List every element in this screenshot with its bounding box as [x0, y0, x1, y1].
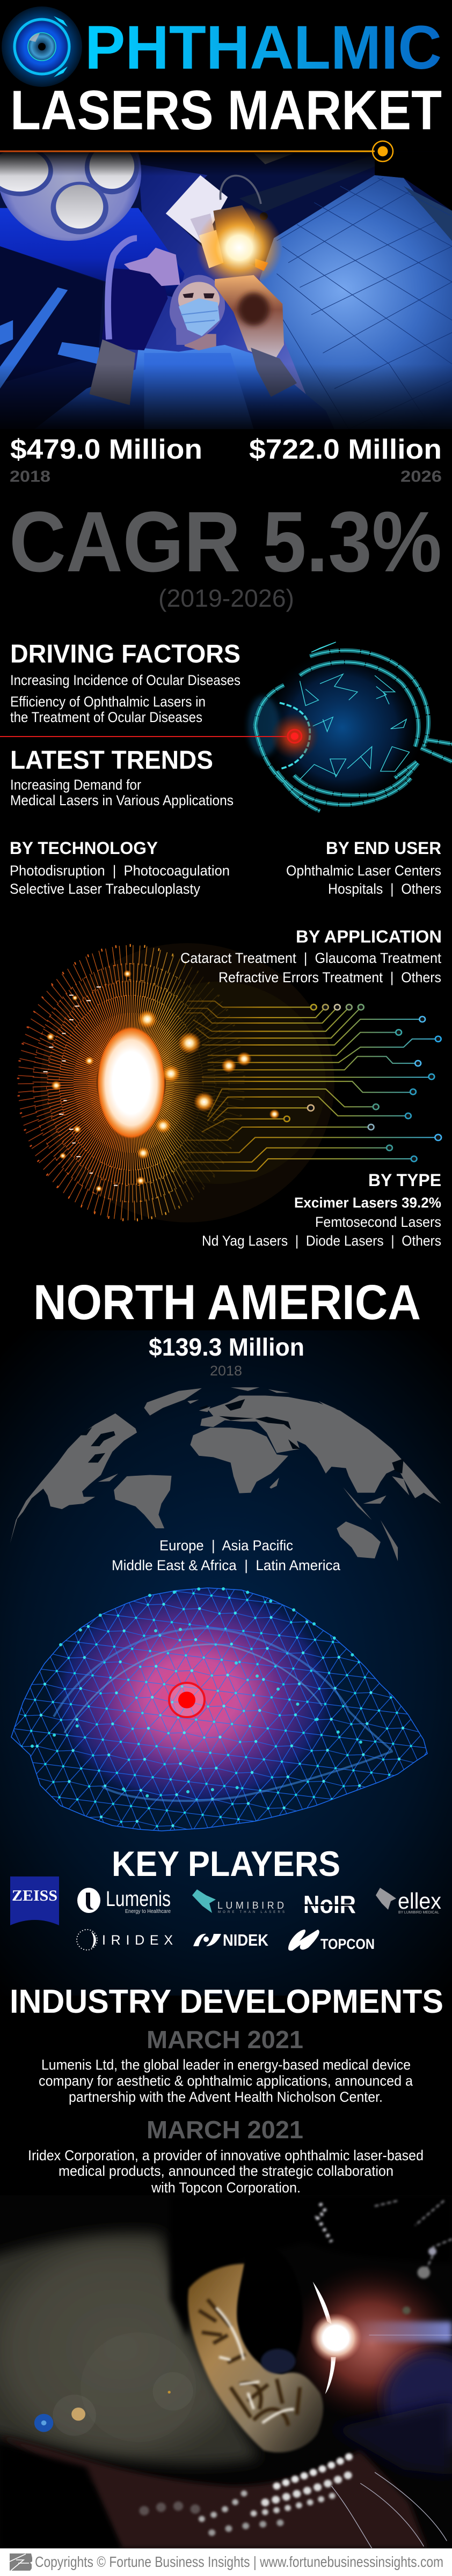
hero photo: surgeon with ophthalmic laser — [0, 151, 452, 429]
factor two: Efficiency of Ophthalmic Lasers in — [10, 694, 206, 710]
lens flare dots — [53, 2395, 96, 2436]
iridex development text — [28, 2147, 424, 2196]
other regions list: Europe | Asia Pacific — [159, 1537, 293, 1554]
face mask — [179, 298, 220, 336]
iridex development text: medical products, announced the strategic collaboration — [59, 2163, 393, 2179]
caribbean — [98, 1474, 118, 1482]
end user list — [286, 863, 441, 897]
logo: lumibird: LUMIBIRD — [217, 1900, 284, 1911]
date: march 2021 iridex: MARCH 2021 — [147, 2116, 303, 2144]
rose glow right of iris — [286, 2264, 452, 2423]
logo: lumibird — [192, 1889, 285, 1914]
logo: lumenis: Lumenis — [106, 1887, 171, 1911]
iridex development text: Iridex Corporation, a provider of innovative ophthalmic laser-based — [28, 2147, 424, 2163]
end user list: Hospitals | Others — [328, 881, 441, 897]
icon: low-poly eye — [248, 642, 452, 811]
panel: key players — [10, 1844, 441, 1952]
heading: latest trends: LATEST TRENDS — [10, 746, 213, 775]
southeast asia islands — [343, 1476, 410, 1561]
nurse gown — [34, 345, 334, 429]
other regions list — [112, 1537, 341, 1573]
pupil — [237, 2239, 303, 2374]
value: 722.0 million: $722.0 Million — [249, 434, 442, 465]
world map globe — [10, 1387, 441, 1561]
panel: by type — [202, 1171, 441, 1249]
iceland and uk — [199, 1407, 210, 1412]
cagr — [9, 494, 442, 612]
market size 2018 — [10, 434, 202, 485]
title: ophthalmic lasers market — [2, 6, 442, 142]
logo: nidek — [193, 1931, 269, 1949]
technology list — [10, 863, 230, 897]
upper lash sparkles — [317, 2200, 452, 2314]
heading: key players: KEY PLAYERS — [112, 1844, 340, 1883]
australia — [337, 1521, 381, 1558]
trend text: Increasing Demand for — [10, 777, 141, 793]
panel: latest trends — [10, 746, 234, 808]
year: 2018: 2018 — [210, 1363, 242, 1379]
bright cyan nodes — [32, 1588, 376, 1800]
trace nodes — [284, 1004, 441, 1161]
boom arm — [239, 168, 370, 212]
upper lid shadow — [170, 2195, 452, 2338]
photo: eye with laser flare — [0, 2195, 452, 2548]
factor two — [10, 694, 206, 725]
value: 139.3 million: $139.3 Million — [149, 1333, 304, 1361]
market size 2026 — [249, 434, 442, 485]
white ceiling panel — [166, 175, 228, 244]
logo: iridex: IRIDEX — [102, 1933, 173, 1948]
logo: ellex: ellex — [398, 1888, 441, 1913]
panel: driving factors — [10, 640, 240, 725]
eurasia — [200, 1396, 441, 1504]
iridex development text: with Topcon Corporation. — [151, 2180, 301, 2196]
panel: north america — [33, 1275, 421, 1379]
arctic islands — [187, 1387, 337, 1409]
logo: lumibird: MORE THAN LASERS — [218, 1911, 285, 1914]
panel: by application — [180, 927, 442, 985]
logo: zeiss — [10, 1876, 59, 1925]
photo fades — [0, 151, 452, 176]
factor two: the Treatment of Ocular Diseases — [10, 709, 202, 725]
logo: lumenis: Energy to Healthcare — [125, 1909, 171, 1915]
cagr period: (2019-2026) — [158, 584, 294, 612]
footer — [0, 2548, 452, 2576]
date: march 2021 lumenis: MARCH 2021 — [147, 2026, 303, 2054]
application list — [180, 950, 441, 985]
other types — [202, 1214, 441, 1249]
circuit laser burst illustration — [18, 943, 441, 1223]
lumenis development text: partnership with the Advent Health Nicholson Center. — [69, 2089, 383, 2105]
trend text — [10, 777, 234, 808]
logo: ellex: BY LUMIBIRD MEDICAL — [398, 1911, 439, 1915]
surgical lamp — [0, 152, 142, 241]
face — [178, 282, 220, 318]
lower lid sparkles — [144, 2454, 355, 2533]
iris texture — [199, 2299, 300, 2426]
technology list: Photodisruption | Photocoagulation — [10, 863, 230, 879]
logo: iridex — [77, 1930, 173, 1950]
factor one: Increasing Incidence of Ocular Diseases — [10, 672, 240, 688]
panel: by end user — [286, 838, 441, 897]
south america — [114, 1475, 172, 1528]
north america landmass — [10, 1414, 137, 1543]
trend text: Medical Lasers in Various Applications — [10, 792, 234, 808]
floor tiles — [259, 175, 452, 429]
heading: by end user: BY END USER — [326, 838, 441, 858]
value: 479.0 million: $479.0 Million — [10, 434, 202, 465]
heading: by application: BY APPLICATION — [296, 927, 442, 946]
laser device — [213, 205, 255, 264]
pupil target — [169, 1683, 205, 1717]
logo: zeiss: ZEISS — [12, 1888, 57, 1904]
africa — [190, 1427, 288, 1493]
nurse neck — [185, 334, 216, 350]
radial burst traces — [18, 945, 244, 1220]
lumenis development text: Lumenis Ltd, the global leader in energy-based medical device — [41, 2057, 411, 2073]
logo: fortune business insights — [10, 2553, 32, 2571]
logo: topcon — [288, 1930, 375, 1952]
icon: glowing blue eye — [2, 6, 82, 87]
heading: phthalmic: PHTHALMIC — [85, 13, 442, 82]
central light — [97, 1027, 165, 1139]
hudson bay — [78, 1427, 115, 1463]
technology list: Selective Laser Trabeculoplasty — [10, 881, 200, 897]
panel: by technology — [10, 838, 230, 897]
inland seas — [199, 1399, 404, 1474]
year: 2026: 2026 — [400, 468, 442, 485]
decorative red line — [0, 736, 287, 737]
glow spots — [46, 970, 280, 1192]
orange pointer line with target marker — [0, 141, 393, 161]
heading: driving factors: DRIVING FACTORS — [10, 640, 240, 668]
mesh eye illustration — [0, 1583, 452, 1840]
leading type share: Excimer Lasers 39.2% — [294, 1195, 441, 1211]
lower lashes — [332, 2472, 447, 2548]
madagascar — [269, 1478, 279, 1489]
year: 2018: 2018 — [10, 468, 50, 485]
heading: north america: NORTH AMERICA — [33, 1275, 421, 1330]
iris — [188, 2264, 323, 2453]
greenland — [144, 1388, 202, 1416]
application list: Cataract Treatment | Glaucoma Treatment — [180, 950, 441, 966]
navy background glow — [0, 1330, 452, 1996]
raised right glove — [215, 275, 284, 361]
heading: by technology: BY TECHNOLOGY — [10, 838, 158, 858]
heading: by type: BY TYPE — [368, 1171, 441, 1190]
lower eyelid band — [0, 2437, 427, 2548]
laser flare — [355, 2321, 452, 2342]
lumenis development text — [39, 2057, 413, 2105]
logo: noir: NoIR — [303, 1890, 356, 1918]
cornea highlight crescent — [313, 2281, 336, 2394]
end user list: Ophthalmic Laser Centers — [286, 863, 441, 879]
logo: ellex — [376, 1888, 441, 1915]
logo: topcon: TOPCON — [320, 1936, 375, 1952]
other regions list: Middle East & Africa | Latin America — [112, 1557, 341, 1573]
heading: industry developments: INDUSTRY DEVELOPMENTS — [10, 1983, 443, 2020]
white circuit pins — [43, 987, 118, 1186]
other types: Femtosecond Lasers — [315, 1214, 441, 1230]
lumenis development text: company for aesthetic & ophthalmic applications, announced a — [39, 2073, 413, 2089]
left arm and glove — [101, 268, 168, 350]
panel: industry developments — [10, 1983, 443, 2196]
logo: nidek: NIDEK — [223, 1931, 269, 1949]
sclera — [0, 2232, 259, 2464]
circuit traces to nodes — [179, 1001, 438, 1171]
hair net — [170, 275, 225, 345]
logo: lumenis — [77, 1887, 171, 1915]
